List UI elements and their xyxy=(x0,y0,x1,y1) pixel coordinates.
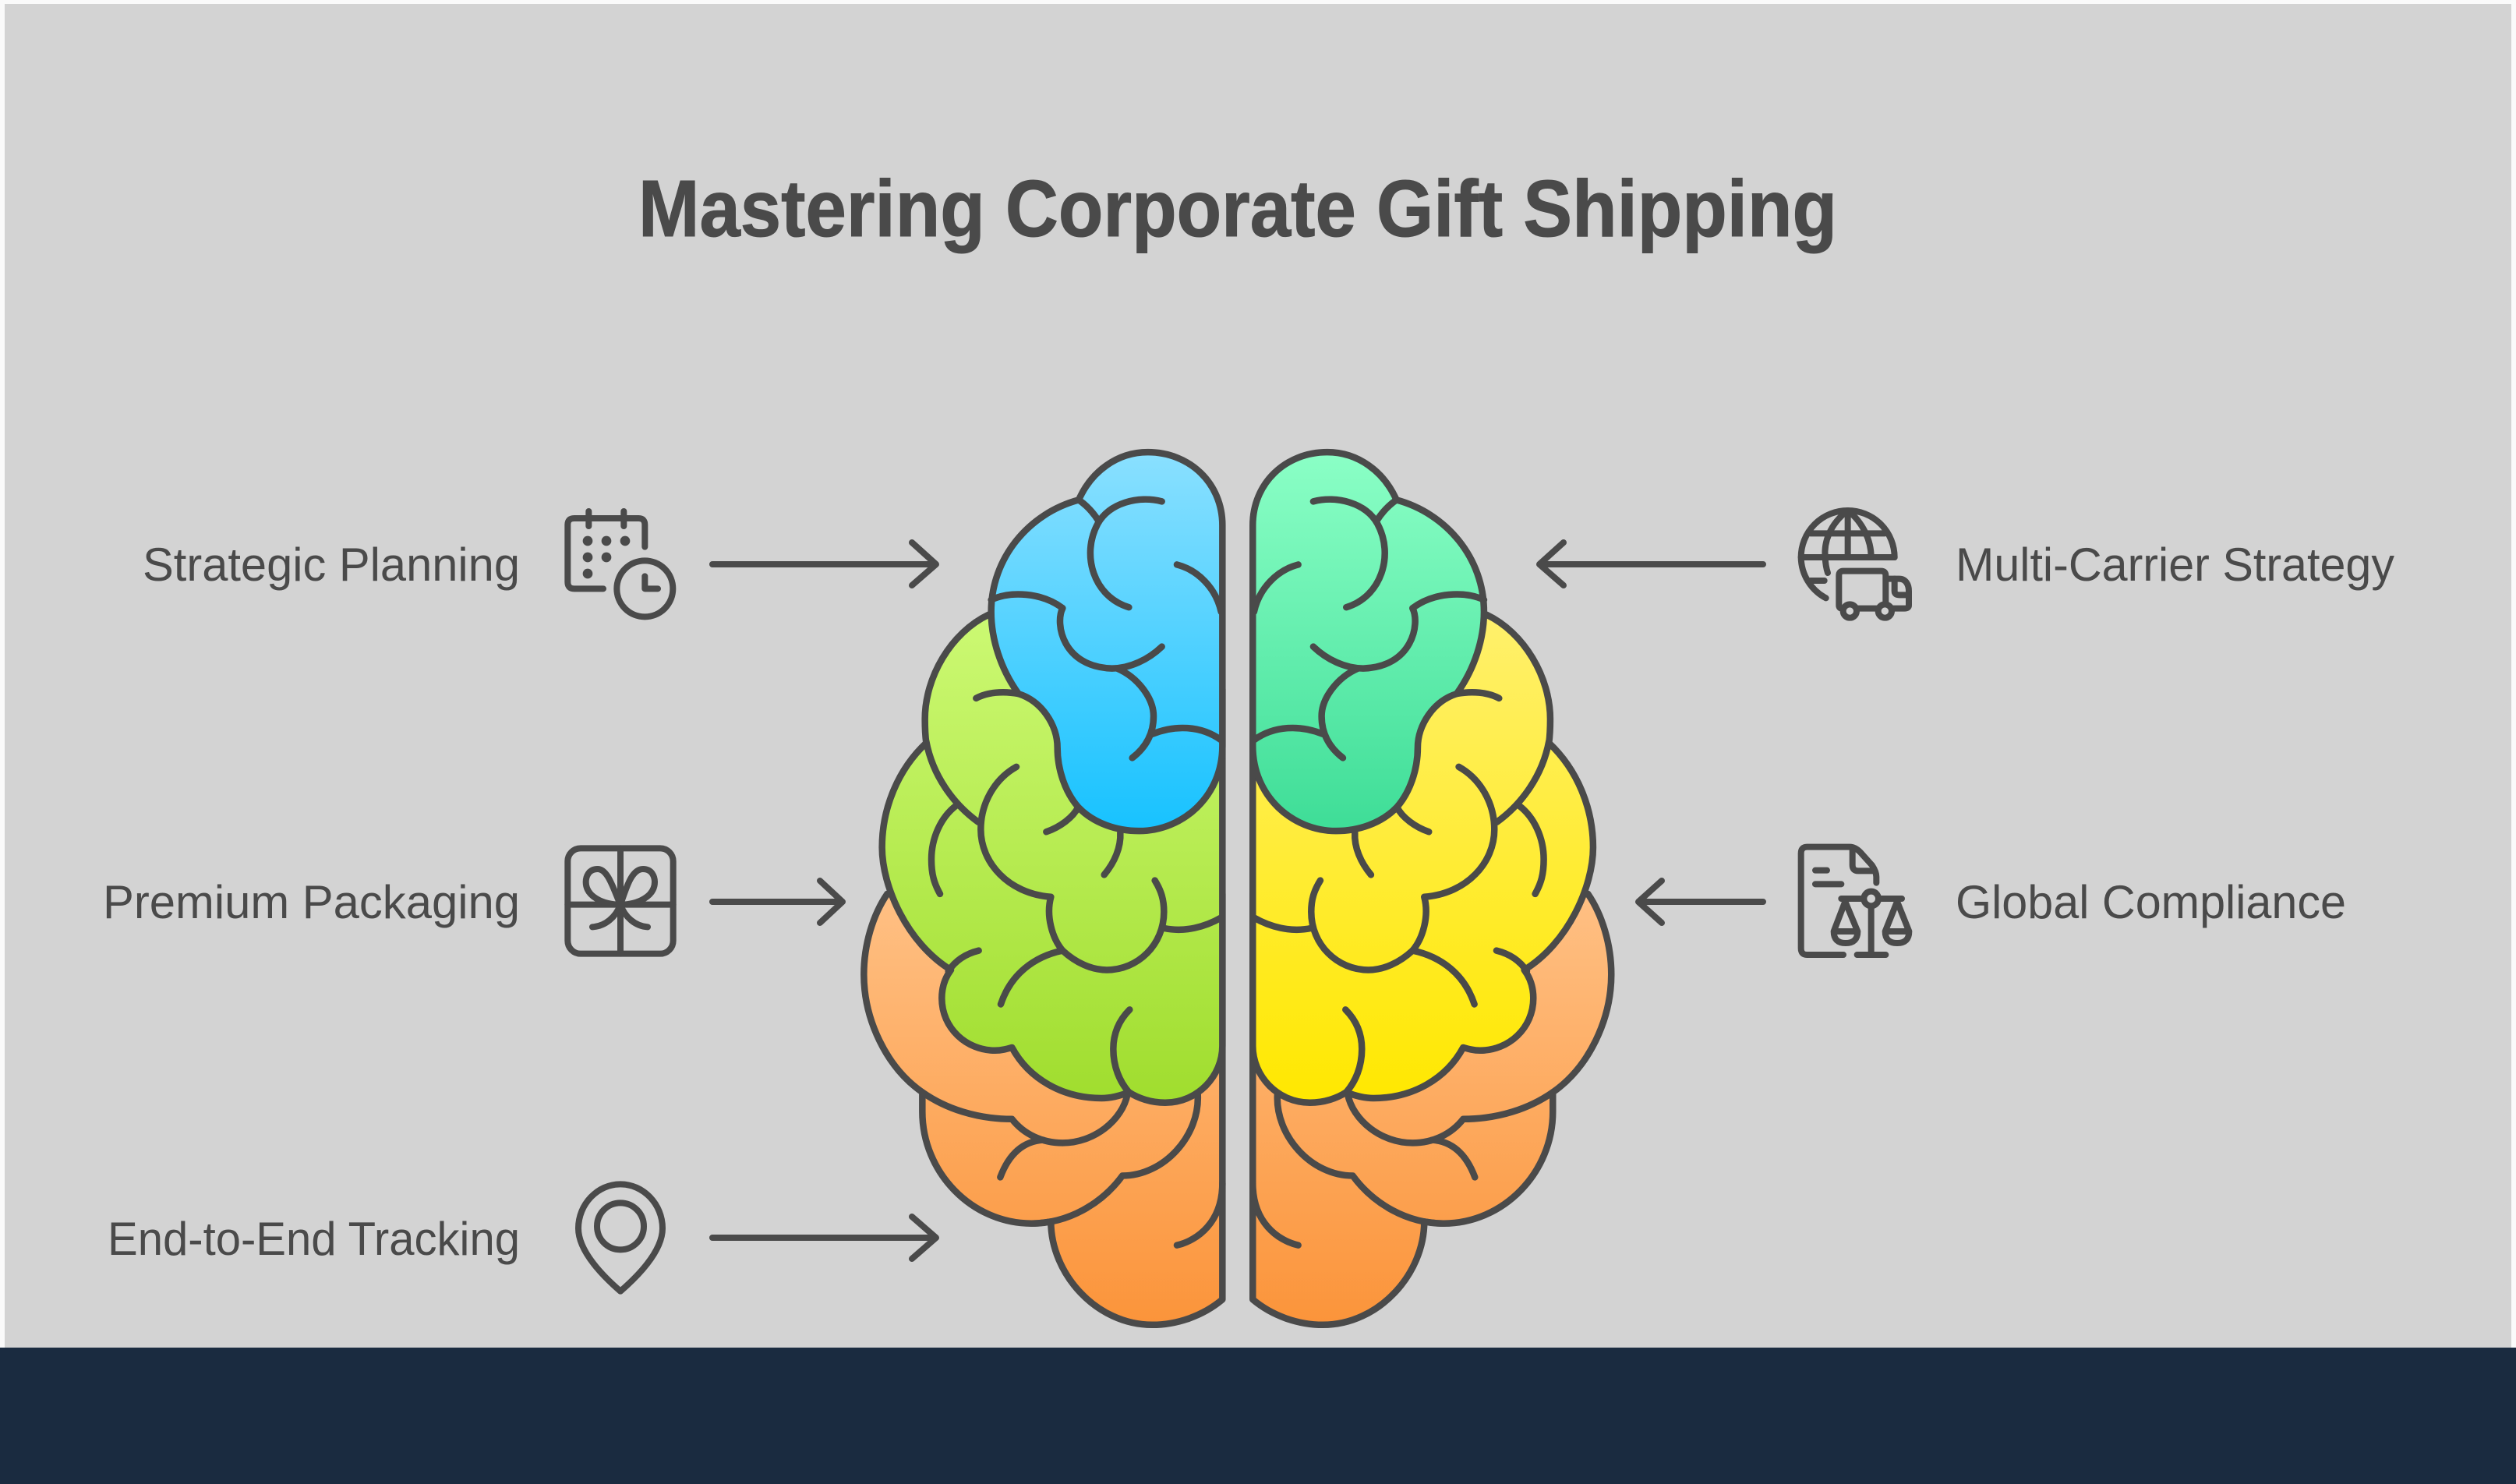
footer band xyxy=(0,1348,2516,1484)
label: Premium Packaging: Premium Packaging xyxy=(103,876,520,928)
icon: location pin xyxy=(578,1184,663,1291)
brain illustration xyxy=(864,452,1611,1325)
lobe: left blue xyxy=(991,452,1222,831)
lobe: right orange xyxy=(1253,894,1611,1325)
left hemisphere xyxy=(864,452,1222,1325)
label: Strategic Planning: Strategic Planning xyxy=(143,539,520,591)
icon: gift box xyxy=(567,848,673,954)
arrow: tracking to brain xyxy=(712,1217,936,1259)
arrow: compliance to brain xyxy=(1638,881,1763,923)
label: Multi-Carrier Strategy: Multi-Carrier Strategy xyxy=(1956,539,2394,591)
arrow: planning to brain xyxy=(712,542,936,585)
arrow: carrier strategy to brain xyxy=(1539,542,1763,585)
icon: calendar with clock xyxy=(567,511,673,617)
lobe: left orange xyxy=(864,894,1222,1325)
icon: globe with truck xyxy=(1801,511,1909,618)
lobe: right teal xyxy=(1253,452,1484,831)
lobe: left green xyxy=(882,615,1222,1103)
label: Global Compliance: Global Compliance xyxy=(1956,876,2346,928)
icon: document with scales xyxy=(1801,847,1909,955)
title: Mastering Corporate Gift Shipping xyxy=(638,164,1837,253)
lobe: right yellow xyxy=(1253,615,1593,1103)
arrow: packaging to brain xyxy=(712,881,843,923)
label: End-to-End Tracking: End-to-End Tracking xyxy=(108,1213,520,1265)
right hemisphere xyxy=(1253,452,1611,1325)
